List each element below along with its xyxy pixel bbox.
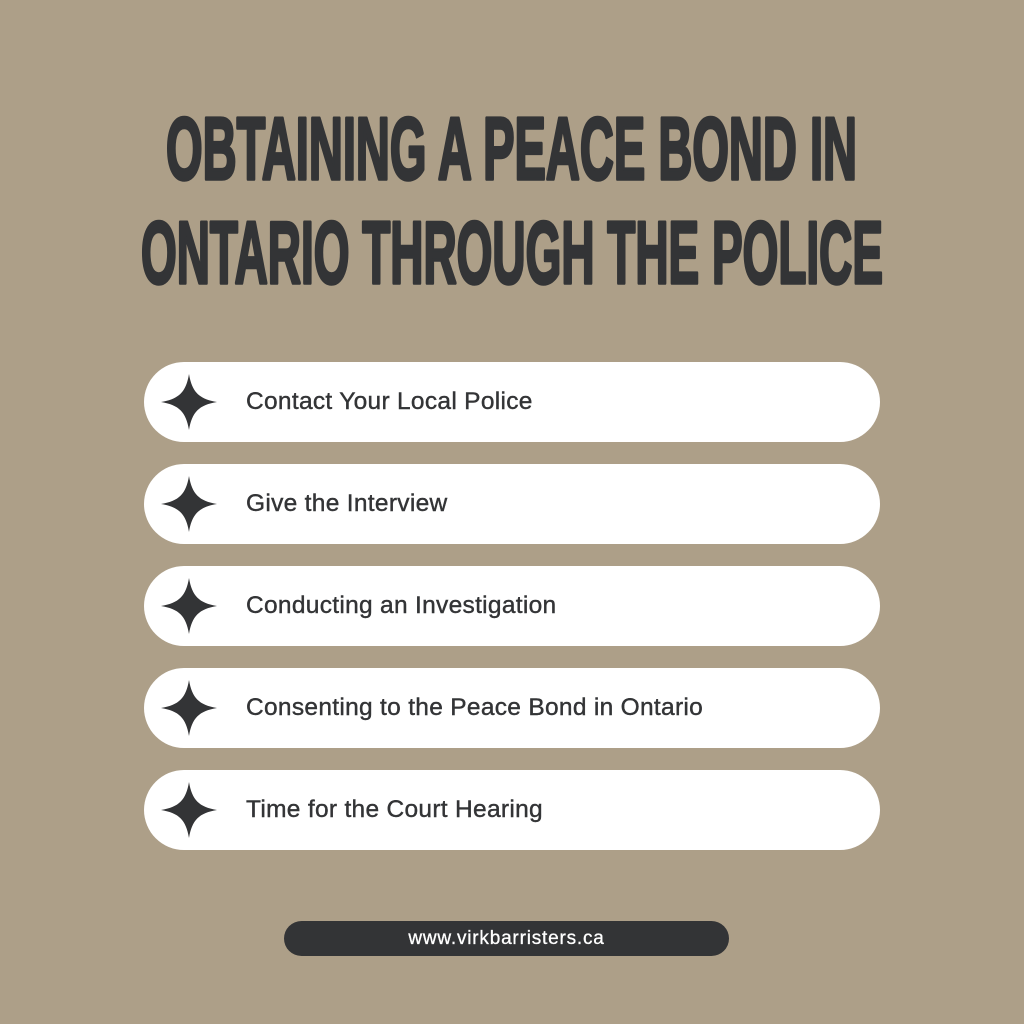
step text: Conducting an Investigation (246, 592, 556, 619)
step 3 (144, 566, 880, 646)
step 2 (144, 464, 880, 544)
step text: Time for the Court Hearing (246, 796, 543, 823)
step text: Consenting to the Peace Bond in Ontario (246, 694, 703, 721)
footer url (284, 921, 729, 956)
footer url: www.virkbarristers.ca (408, 928, 605, 949)
step list (144, 362, 880, 850)
icon: star (161, 680, 217, 736)
step 5 (144, 770, 880, 850)
icon: star (161, 782, 217, 838)
step text: Contact Your Local Police (246, 388, 533, 415)
step text: Give the Interview (246, 490, 447, 517)
step 4 (144, 668, 880, 748)
step 1 (144, 362, 880, 442)
icon: star (161, 374, 217, 430)
title (141, 100, 883, 300)
icon: star (161, 578, 217, 634)
icon: star (161, 476, 217, 532)
